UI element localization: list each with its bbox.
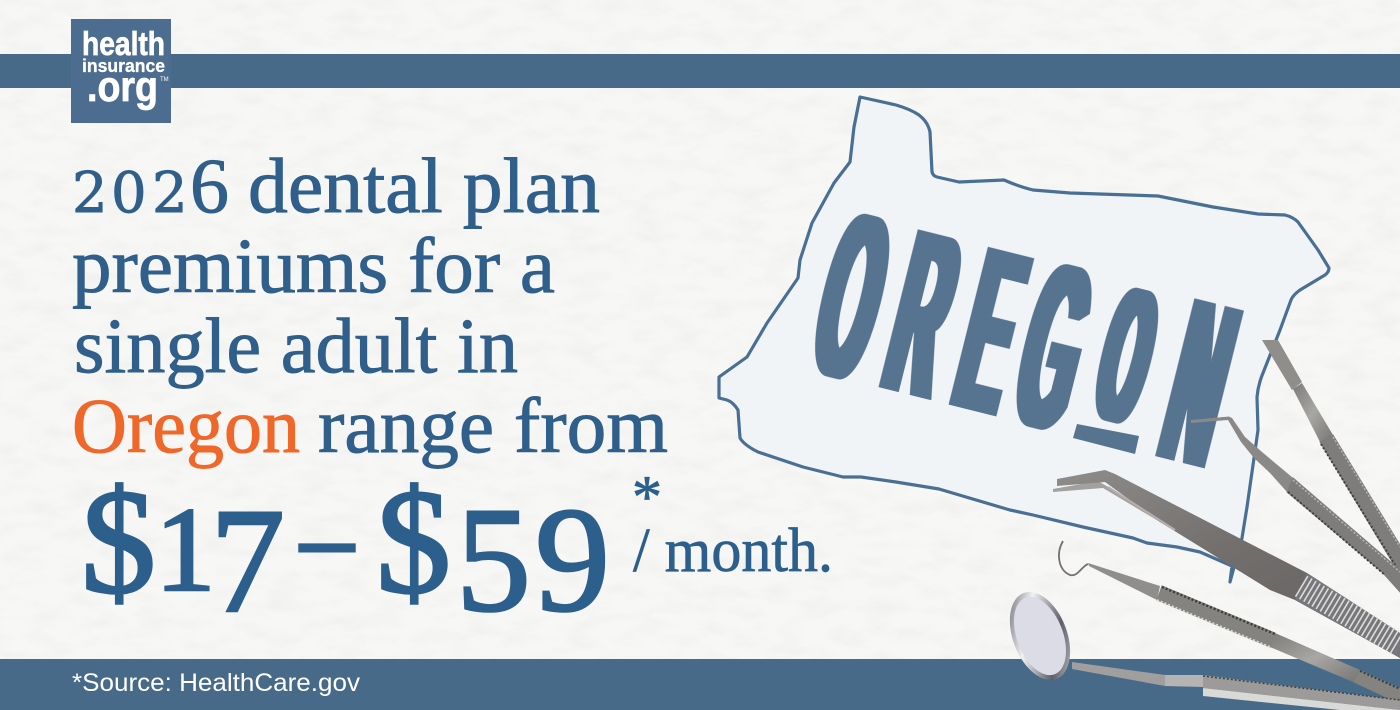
logo: TM <box>160 77 169 83</box>
price range: 7 <box>210 478 285 644</box>
headline line 3: single adult in <box>74 302 518 389</box>
dental instrument: mouth mirror <box>998 583 1400 710</box>
price range: 1 <box>155 483 216 617</box>
headline <box>72 142 668 469</box>
state name lettering: O <box>1080 246 1174 465</box>
top bar <box>0 54 1400 88</box>
state name lettering: N <box>1144 249 1255 516</box>
headline line 2: premiums for a <box>72 222 555 309</box>
source note: *Source: HealthCare.gov <box>72 669 361 697</box>
logo <box>71 19 171 123</box>
state name lettering <box>795 162 1255 516</box>
logo: health <box>82 25 165 62</box>
state name lettering: OREG <box>795 162 1112 481</box>
per month label: / month. <box>633 517 833 585</box>
dental instrument: sickle probe <box>1191 416 1400 592</box>
logo: .org <box>87 63 158 111</box>
price range: $ <box>376 459 451 625</box>
Oregon state outline <box>719 97 1329 582</box>
underline bar beneath the second O <box>1073 424 1139 454</box>
dental instrument: explorer probe <box>1059 541 1400 704</box>
price range: 9 <box>535 477 610 643</box>
price range: – <box>300 480 354 595</box>
price range: $ <box>81 459 156 625</box>
logo: insurance <box>82 56 165 76</box>
headline line 1: dental plan <box>248 142 600 229</box>
bottom bar <box>0 659 1400 710</box>
price range: 5 <box>456 477 531 643</box>
headline line 1: 6 <box>190 142 229 229</box>
headline line 1: 202 <box>72 161 188 226</box>
headline line 4: Oregon <box>72 382 300 469</box>
asterisk: * <box>632 464 662 530</box>
dental instrument: spatula <box>1262 340 1400 575</box>
dental instrument: tweezers <box>1053 470 1400 658</box>
headline line 4: range from <box>318 382 668 469</box>
